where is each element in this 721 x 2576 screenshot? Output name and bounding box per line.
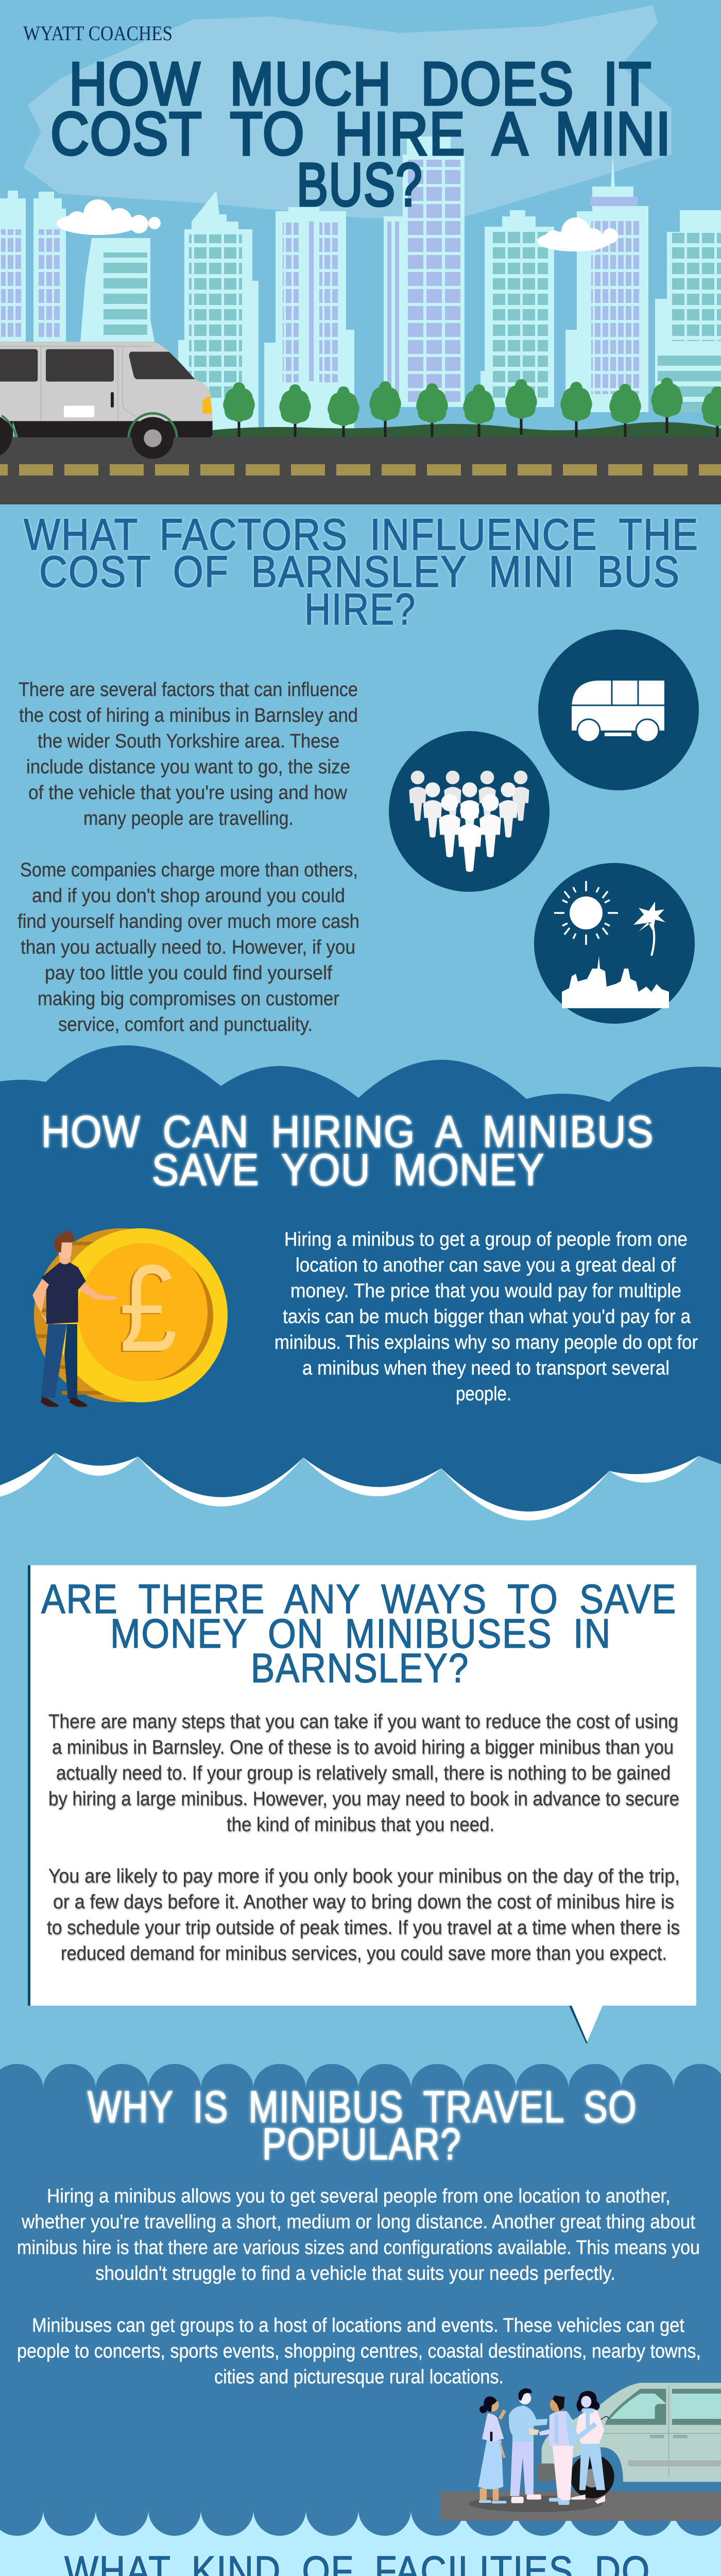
- text block: people.: [456, 1383, 511, 1405]
- text block: a minibus in Barnsley. One of these is to avoid hiring a bigger minibus than you: [52, 1737, 674, 1758]
- logo: WYATT COACHES: [23, 22, 173, 45]
- panel: why popular: [0, 2064, 721, 2536]
- road dashes: [0, 464, 721, 476]
- heading: what factors: [24, 510, 699, 634]
- heading: BARNSLEY?: [251, 1645, 469, 1691]
- text block: There are many steps that you can take if you want to reduce the cost of using: [48, 1711, 678, 1733]
- illustration: people and van: [440, 2383, 721, 2521]
- coin: [34, 1228, 228, 1402]
- scalloped band: [0, 2064, 721, 2536]
- heading: [88, 2082, 637, 2169]
- text block: factors: find yourself handing over much more cash: [18, 911, 359, 933]
- text block: factors: making big compromises on customer: [38, 988, 339, 1010]
- trees: [223, 378, 721, 442]
- heading: POPULAR?: [262, 2120, 461, 2169]
- text block: location to another can save you a great deal of: [296, 1255, 676, 1276]
- text block: factors: of the vehicle that you're using and how: [28, 782, 348, 804]
- panel: ways to save: [28, 1565, 696, 2043]
- icon: people circle: [389, 731, 550, 892]
- panel: facilities background: [0, 2508, 721, 2576]
- text block: the kind of minibus that you need.: [227, 1814, 494, 1836]
- text block: or a few days before it. Another way to bring down the cost of minibus hire is: [53, 1891, 674, 1913]
- people: [478, 2388, 609, 2505]
- text block: factors: the cost of hiring a minibus in Barnsley and: [19, 705, 358, 726]
- text block: factors: include distance you want to go, the size: [26, 756, 350, 778]
- heading: MONEY ON MINIBUSES IN: [110, 1611, 611, 1656]
- hills: [212, 422, 721, 437]
- text block: You are likely to pay more if you only book your minibus on the day of the trip,: [48, 1866, 680, 1887]
- text block: [17, 2185, 701, 2388]
- text block: factors: the wider South Yorkshire area. These: [38, 731, 339, 752]
- text block: Hiring a minibus to get a group of people from one: [284, 1229, 688, 1250]
- clouds: [57, 199, 618, 251]
- text block: money. The price that you would pay for multiple: [290, 1280, 681, 1302]
- skyline buildings: [0, 137, 721, 438]
- text block: factors: many people are travelling.: [83, 808, 294, 829]
- text block: factors: There are several factors that can influence: [19, 679, 358, 701]
- man: [32, 1230, 118, 1407]
- minibus van: [0, 342, 213, 459]
- coin: £: [119, 1239, 177, 1377]
- heading: HOW CAN HIRING A MINIBUS: [41, 1107, 654, 1157]
- panel: hero: [0, 5, 721, 504]
- text block: factors: than you actually need to. However, if you: [21, 937, 355, 958]
- text block: factors: [18, 679, 359, 1036]
- heading: what factors: HIRE?: [304, 585, 416, 634]
- text block: Hiring a minibus allows you to get several people from one location to another,: [47, 2185, 671, 2207]
- title: HOW MUCH DOES IT: [69, 50, 652, 118]
- text block: factors: Some companies charge more than others,: [20, 859, 358, 881]
- heading: [41, 1107, 654, 1195]
- speech box: [28, 1565, 31, 2006]
- text block: factors: service, comfort and punctuality.: [58, 1014, 313, 1036]
- text block: factors: and if you don't shop around you could: [32, 885, 345, 907]
- heading: SAVE YOU MONEY: [152, 1145, 545, 1195]
- text block: cities and picturesque rural locations.: [214, 2366, 504, 2388]
- text block: actually need to. If your group is relatively small, there is nothing to be gained: [56, 1762, 671, 1784]
- icon: bus circle: [538, 630, 699, 790]
- text block: factors: pay too little you could find yourself: [45, 962, 332, 984]
- cloud shadow: [0, 1236, 721, 1520]
- title: BUS?: [297, 151, 423, 219]
- text block: [274, 1229, 698, 1405]
- text block: reduced demand for minibus services, you could save more than you expect.: [61, 1943, 667, 1964]
- cloud: [0, 1045, 721, 1512]
- heading: [41, 1576, 677, 1691]
- panel: save money: [0, 1045, 721, 1520]
- road: [0, 437, 721, 504]
- icon: destinations circle: [534, 863, 695, 1024]
- text block: [47, 1711, 680, 1964]
- title: [50, 50, 672, 219]
- text block: by hiring a large minibus. However, you may need to book in advance to secure: [48, 1788, 679, 1810]
- text block: taxis can be much bigger than what you'd pay for a: [283, 1306, 691, 1328]
- text block: to schedule your trip outside of peak times. If you travel at a time when there is: [47, 1917, 680, 1939]
- text block: shouldn't struggle to find a vehicle that suits your needs perfectly.: [95, 2263, 615, 2284]
- brush stroke background: [23, 5, 672, 218]
- text block: a minibus when they need to transport several: [302, 1358, 670, 1379]
